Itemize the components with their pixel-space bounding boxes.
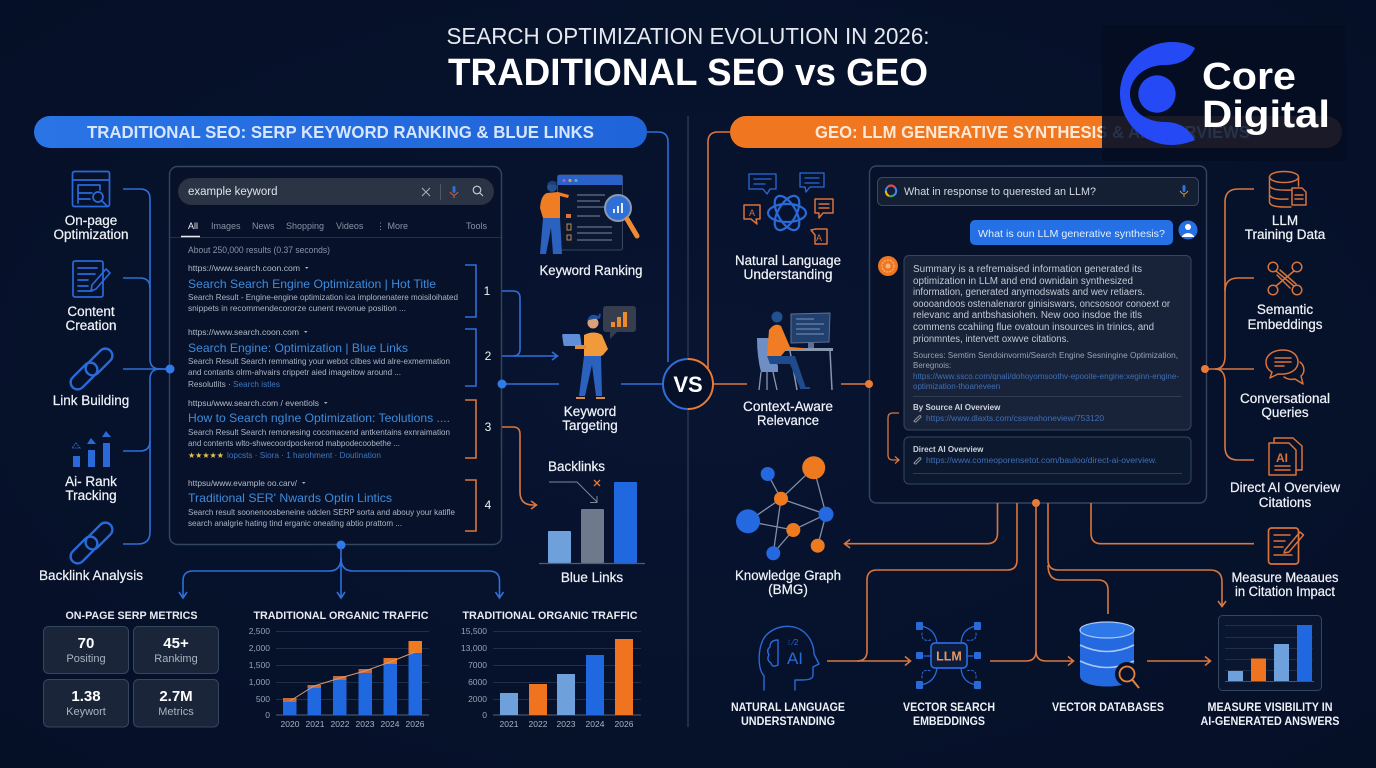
label: LLM training data: Training Data — [1245, 227, 1326, 242]
rank brackets — [465, 265, 492, 531]
label: context-aware relevance: Relevance — [757, 413, 819, 428]
label: keyword ranking: Keyword Ranking — [540, 263, 642, 278]
AI summary card: https://www.ssco.com/qnali/dohoyomsoothv-epooite-engine:xeginn-engine- — [913, 372, 1179, 381]
label: conversational queries: Queries — [1261, 405, 1309, 420]
AI response avatar — [878, 256, 898, 276]
tabs: All — [188, 221, 198, 231]
label: keyword targeting: Targeting — [562, 418, 618, 433]
chart: traditional organic traffic 2020-2026 — [249, 610, 429, 729]
icon: AI head — [759, 626, 819, 690]
tabs: ⋮ More — [376, 221, 408, 231]
logo panel: Core — [1202, 56, 1296, 98]
panel: on-page SERP metrics — [44, 610, 218, 727]
chart: traditional organic traffic 2020-2026: 2026 — [406, 719, 425, 729]
result 3: Search Result Search remonesing cocomacend antkentains exnraimation — [188, 428, 450, 437]
connectors: GEO panel to right column — [1201, 189, 1254, 460]
label: on-page optimization — [53, 213, 129, 242]
result 2: Search Engine: Optimization | Blue Links — [188, 341, 408, 355]
result 1: Search Result - Engine-engine optimization ica implonenatere moisiloihated — [188, 293, 458, 302]
logo panel: Digital — [1202, 94, 1330, 136]
VS badge — [663, 359, 713, 409]
chart: traditional organic traffic 2020-2026: 1,000 — [249, 677, 270, 687]
icon: vector database — [1080, 622, 1139, 688]
chart: traditional organic traffic 2021-2026: 2000 — [468, 694, 487, 704]
chart: traditional organic traffic 2021-2026: TRADITIONAL ORGANIC TRAFFIC — [462, 610, 638, 622]
AI summary card: optimization in LLM and end ownidain synthesized — [913, 276, 1133, 287]
result 2: and contants olrm-ahvairs crippetr aied imageitow around ... — [188, 368, 401, 377]
label: on-page optimization: On-page — [65, 213, 117, 228]
AI summary card: Summary is a refremaised information generated its — [913, 264, 1142, 275]
icon: natural language cluster: A — [749, 208, 755, 218]
chart: traditional organic traffic 2020-2026: 2023 — [356, 719, 375, 729]
AI summary card: commens ccahiing flue ovatoun insources in trinics, and — [913, 322, 1154, 333]
search bar: example keyword — [188, 186, 277, 198]
icon: on-page optimization — [72, 172, 110, 206]
chart: traditional organic traffic 2021-2026: 2022 — [529, 719, 548, 729]
heading: traditional SEO pill: TRADITIONAL SEO: SERP KEYWORD RANKING & BLUE LINKS — [87, 122, 594, 142]
result 3: How to Search ngIne Optimization: Teolutions .... — [188, 411, 450, 425]
icon: measure citation impact — [1268, 528, 1304, 564]
label: keyword targeting — [562, 404, 618, 433]
title: SEARCH OPTIMIZATION EVOLUTION IN 2026: — [446, 23, 930, 49]
label: semantic embeddings — [1247, 302, 1323, 332]
result 1: snippets in recommendecororze cunent revonue position ... — [188, 304, 406, 313]
label: semantic embeddings: Embeddings — [1247, 317, 1323, 332]
label: direct AI overview citations — [1230, 480, 1340, 510]
chart: traditional organic traffic 2021-2026: 2021 — [500, 719, 519, 729]
label: direct AI overview citations: Citations — [1259, 495, 1312, 510]
AI summary card — [904, 256, 1191, 430]
tabs: Videos — [336, 221, 364, 231]
bracket arrow between cards — [888, 413, 899, 464]
label: natural language understanding pipeline step — [731, 700, 845, 728]
label: LLM training data — [1245, 213, 1326, 242]
AI summary card: https://www.dlaxts.com/cssreahoneview/753120 — [926, 414, 1105, 423]
rank brackets: 3 — [485, 420, 492, 434]
user question bubble: What is oun LLM generative synthesis? — [978, 228, 1165, 240]
label: link building: Link Building — [53, 393, 129, 408]
chart: backlinks and blue links — [539, 459, 645, 585]
icon: AI head: AI — [787, 649, 803, 668]
chart: traditional organic traffic 2020-2026: 500 — [256, 694, 270, 704]
chart: traditional organic traffic 2020-2026: TRADITIONAL ORGANIC TRAFFIC — [254, 610, 429, 622]
connectors: SERP to middle column — [498, 132, 869, 509]
chart: backlinks and blue links: Blue Links — [561, 570, 623, 585]
metric: 45+ ranking: 45+ — [163, 635, 189, 652]
tabs: Shopping — [286, 221, 324, 231]
title: TRADITIONAL SEO vs GEO — [448, 52, 928, 94]
chart: traditional organic traffic 2020-2026: 1,500 — [249, 660, 270, 670]
result 3: ★★★★★ — [188, 451, 224, 460]
metric: 70 positing: 70 — [78, 635, 94, 652]
tabs — [170, 221, 501, 255]
icon: backlink analysis — [68, 520, 115, 566]
heading: traditional SEO pill — [34, 116, 647, 148]
label: vector search embeddings — [903, 700, 995, 728]
direct AI overview card: https://www.comeoporensetot.com/bauloo/direct-ai-overview. — [926, 456, 1157, 465]
AI summary card: Sources: Semtim Sendoinvormi/Search Engine Sesningine Optimization, — [913, 351, 1178, 360]
icon: LLM vector search — [916, 622, 981, 689]
metric: 2.7M metrics — [134, 680, 218, 727]
label: context-aware relevance: Context-Aware — [743, 399, 833, 414]
illustration: keyword ranking — [540, 175, 637, 254]
connectors: GEO panel to lower pipeline — [827, 499, 1254, 666]
illustration: context-aware person at desk — [757, 312, 833, 390]
result 1: Search Search Engine Optimization | Hot Title — [188, 277, 436, 291]
tabs: About 250,000 results (0.37 seconds) — [188, 245, 330, 255]
rank brackets: 2 — [485, 349, 492, 363]
result 2 — [188, 327, 450, 389]
icon: content creation — [73, 261, 110, 297]
chart: traditional organic traffic 2021-2026: 7000 — [468, 660, 487, 670]
metric: 45+ ranking: Rankimg — [154, 653, 198, 665]
result 2: Resolutlits · Search istles — [188, 380, 280, 389]
result 2: Search Result Search remmating your webot cilbes wid alre-exmermation — [188, 357, 450, 366]
result 4: Search result soonenoosbeneine odclen SERP sorta and abouy your katifle — [188, 508, 455, 517]
chart: traditional organic traffic 2020-2026: 2,000 — [249, 643, 270, 653]
result 1 — [188, 263, 458, 313]
query bar: What in response to querested an LLM? — [904, 186, 1096, 198]
AI summary card: optimization-thoaneveen — [913, 382, 1000, 391]
result 3 — [188, 398, 450, 460]
metric: 45+ ranking — [134, 626, 218, 674]
connectors: left inputs to SERP panel — [123, 189, 174, 544]
connector node: context-aware to GEO panel — [865, 380, 873, 388]
result 4 — [188, 478, 455, 528]
chart: traditional organic traffic 2020-2026: 2020 — [281, 719, 300, 729]
label: on-page optimization: Optimization — [53, 227, 129, 242]
label: measure citation impact — [1232, 570, 1339, 599]
label: semantic embeddings: Semantic — [1257, 302, 1313, 317]
result 4: search analgrie hating tind erganic oneating abtio prattom ... — [188, 519, 402, 528]
illustration: keyword targeting — [562, 306, 636, 399]
icon: semantic embeddings — [1268, 262, 1302, 295]
result 4: Traditional SER' Nwards Optin Lintics — [188, 491, 392, 505]
label: knowledge graph: Knowledge Graph — [735, 568, 841, 583]
chart: traditional organic traffic 2021-2026: 6000 — [468, 677, 487, 687]
label: conversational queries: Conversational — [1240, 391, 1330, 406]
label: knowledge graph: (BMG) — [768, 582, 808, 597]
tabs: Tools — [466, 221, 488, 231]
title — [446, 23, 930, 94]
chart: AI visibility bars — [1218, 616, 1322, 690]
result 2: https://www.search.coon.com — [188, 327, 299, 337]
connectors: SERP down to metrics — [179, 540, 504, 598]
label: measure visibility in AI-generated answers: MEASURE VISIBILITY IN — [1208, 700, 1332, 714]
chart: traditional organic traffic 2021-2026: 15,500 — [461, 626, 487, 636]
AI summary card: information, generated anymodswats and wev retiaers. — [913, 287, 1145, 298]
chart: traditional organic traffic 2021-2026: 0 — [482, 710, 487, 720]
chart: traditional organic traffic 2021-2026: 2026 — [615, 719, 634, 729]
label: LLM training data: LLM — [1272, 213, 1298, 228]
metric: 2.7M metrics: 2.7M — [159, 688, 193, 705]
label: measure citation impact: Measure Meaaues — [1232, 570, 1339, 585]
logo panel — [1102, 42, 1342, 161]
label: measure visibility in AI-generated answers — [1200, 700, 1340, 728]
icon: LLM training data — [1270, 172, 1306, 207]
icon: direct AI overview citations — [1269, 438, 1302, 475]
search bar — [178, 178, 494, 205]
chart: backlinks and blue links: Backlinks — [548, 459, 605, 474]
label: context-aware relevance — [743, 399, 833, 428]
icon: link building — [68, 346, 115, 392]
label: natural language understanding: Understanding — [744, 267, 832, 282]
icon: LLM vector search: LLM — [936, 650, 962, 664]
AI summary card: By Source AI Overview — [913, 403, 1001, 412]
result 3: and contents wlto-shwecoordpockerod mabpodecoobethe ... — [188, 439, 400, 448]
diagram: knowledge graph — [736, 456, 834, 560]
label: keyword targeting: Keyword — [564, 404, 616, 419]
metric: 1.38 keyword: Keywort — [66, 706, 106, 718]
heading: GEO pill — [730, 116, 1102, 148]
label: backlink analysis: Backlink Analysis — [39, 568, 143, 583]
icon: natural language cluster — [744, 173, 833, 244]
metric: 2.7M metrics: Metrics — [158, 706, 194, 718]
heading: GEO pill: GEO: LLM GENERATIVE SYNTHESIS & AI OVERVIEWS — [815, 122, 1250, 142]
query bar — [878, 178, 1198, 206]
label: conversational queries — [1240, 391, 1330, 420]
panel: on-page SERP metrics: ON-PAGE SERP METRICS — [66, 610, 198, 622]
result 1: https://www.search.coon.com — [188, 263, 300, 273]
chart: traditional organic traffic 2020-2026: 2021 — [306, 719, 325, 729]
label: direct AI overview citations: Direct AI Overview — [1230, 480, 1340, 495]
VS badge: VS — [673, 372, 703, 397]
label: natural language understanding pipeline step: UNDERSTANDING — [741, 714, 835, 728]
panel: GEO AI answer — [870, 166, 1206, 503]
chart: traditional organic traffic 2021-2026 — [461, 610, 641, 729]
chart: traditional organic traffic 2020-2026: 2,500 — [249, 626, 270, 636]
user question bubble — [970, 220, 1198, 245]
tabs: Images — [211, 221, 241, 231]
AI summary card: ooooandoos ostenalenaror ginisiswars, oncsosoor conoext or — [913, 299, 1171, 310]
result 3: httpsu/www.search.com / eventlols — [188, 398, 319, 408]
chart: traditional organic traffic 2021-2026: 2024 — [586, 719, 605, 729]
chart: traditional organic traffic 2021-2026: 2023 — [557, 719, 576, 729]
label: content creation: Content — [67, 304, 115, 319]
icon: conversational queries — [1266, 350, 1304, 384]
rank brackets: 4 — [485, 498, 492, 512]
label: natural language understanding — [735, 253, 841, 282]
tabs: News — [252, 221, 275, 231]
metric: 1.38 keyword — [44, 680, 128, 727]
chart: traditional organic traffic 2020-2026: 2024 — [381, 719, 400, 729]
label: AI rank tracking: Ai- Rank — [65, 474, 117, 489]
chart: traditional organic traffic 2020-2026: 0 — [265, 710, 270, 720]
label: content creation: Creation — [65, 318, 117, 333]
AI summary card: relevanc and antbshasiohen. New ooo insdoe the itls — [913, 310, 1142, 321]
label: content creation — [65, 304, 117, 333]
label: AI rank tracking: Tracking — [65, 488, 117, 503]
result 4: httpsu/www.evample oo.carv/ — [188, 478, 298, 488]
rank brackets: 1 — [484, 284, 491, 298]
label: natural language understanding pipeline step: NATURAL LANGUAGE — [731, 700, 845, 714]
icon: direct AI overview citations: AI — [1276, 451, 1288, 465]
chart: traditional organic traffic 2021-2026: 13,000 — [461, 643, 487, 653]
metric: 70 positing — [44, 626, 128, 674]
direct AI overview card — [904, 437, 1191, 484]
label: vector search embeddings: VECTOR SEARCH — [903, 700, 995, 714]
chart: traditional organic traffic 2020-2026: 2022 — [331, 719, 350, 729]
panel: SERP results — [170, 166, 502, 544]
icon: natural language cluster: A — [816, 233, 822, 243]
logo panel: GEO: LLM GENERATIVE SYNTHESIS & AI OVERVIEWS — [815, 122, 1250, 142]
label: AI rank tracking — [65, 474, 117, 503]
icon: AI head: ⁝ ⁄2 — [788, 638, 799, 647]
AI summary card: Beregnois: — [913, 361, 951, 370]
label: natural language understanding: Natural Language — [735, 253, 841, 268]
metric: 1.38 keyword: 1.38 — [71, 688, 101, 705]
label: measure citation impact: in Citation Impact — [1235, 584, 1335, 599]
result 3: lopcsts · Siora · 1 harohment · Doutination — [227, 451, 381, 460]
label: knowledge graph — [735, 568, 841, 597]
label: vector search embeddings: EMBEDDINGS — [913, 714, 985, 728]
metric: 70 positing: Positing — [66, 653, 106, 665]
label: measure visibility in AI-generated answers: AI-GENERATED ANSWERS — [1200, 714, 1340, 728]
AI summary card: prionmntes, intervett oxwve citations. — [913, 334, 1069, 345]
icon: AI rank tracking — [72, 431, 111, 467]
direct AI overview card: Direct AI Overview — [913, 445, 984, 454]
label: vector databases: VECTOR DATABASES — [1052, 700, 1164, 714]
